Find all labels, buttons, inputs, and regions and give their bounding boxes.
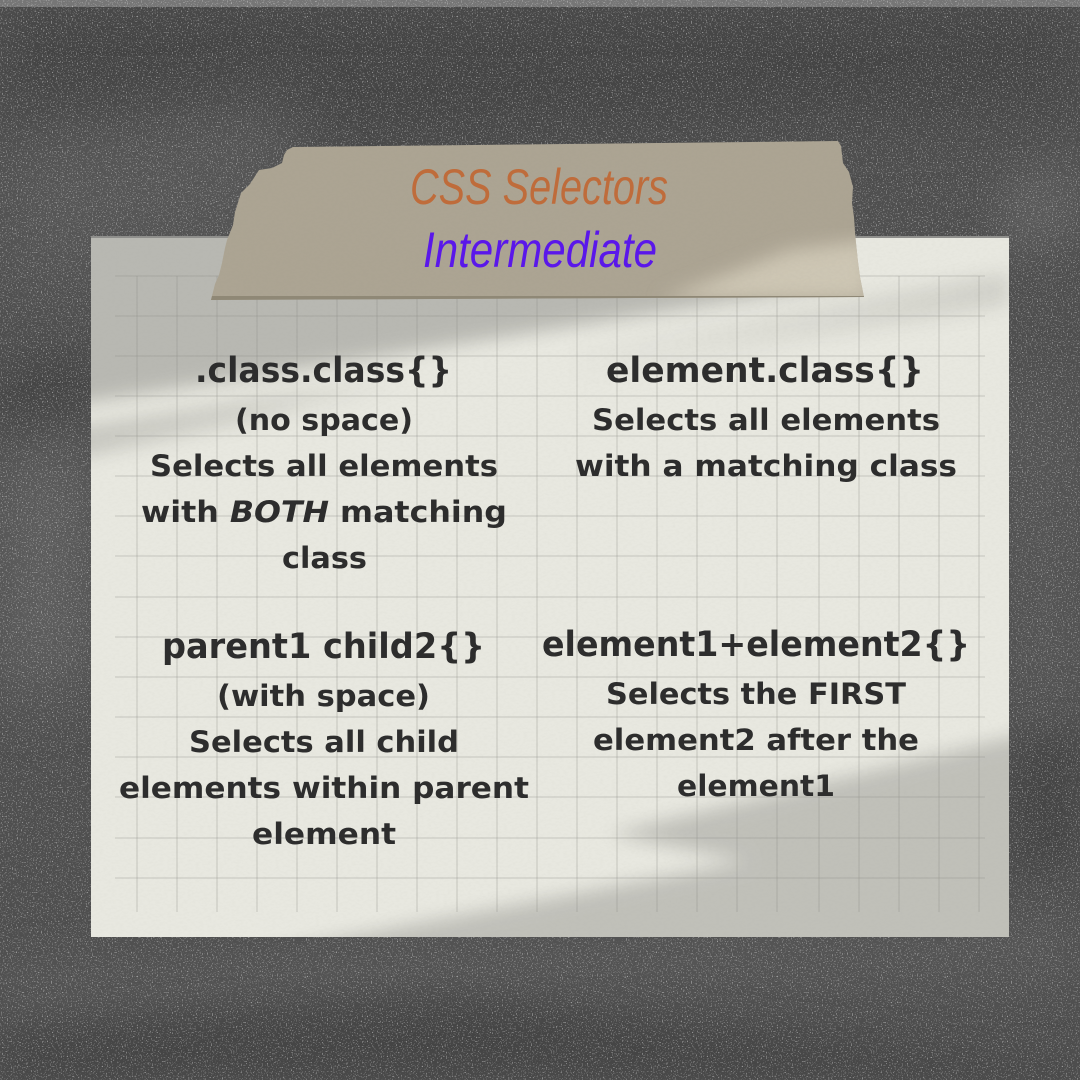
description: element.class: with a matching class	[575, 449, 957, 483]
description: element.class	[575, 403, 957, 483]
description: adjacent sibling: Selects the FIRST	[606, 677, 906, 711]
masking tape banner	[205, 140, 870, 305]
description: element.class: Selects all elements	[592, 403, 940, 437]
text block: .class.class	[141, 351, 507, 575]
description: adjacent sibling: element2 after the	[593, 723, 919, 757]
description: parent child: Selects all child	[189, 725, 459, 759]
description: class.class: (no space)	[235, 403, 413, 437]
description: class.class: Selects all elements	[150, 449, 498, 483]
description: parent child: (with space)	[217, 679, 430, 713]
text block: element.class	[575, 351, 957, 483]
heading: .class.class{}: .class.class{}	[195, 351, 452, 391]
description: adjacent sibling: element1	[677, 769, 835, 803]
grid lines	[115, 276, 985, 912]
title: CSS Selectors: CSS Selectors	[410, 159, 668, 215]
subtitle: Intermediate: Intermediate	[423, 222, 657, 278]
description: class.class: with BOTH matching	[141, 495, 507, 529]
description: parent child: element	[252, 817, 396, 851]
text block: element1+element2	[542, 625, 970, 803]
heading: element.class{}: element.class{}	[606, 351, 924, 391]
heading: element1+element2{}: element1+element2{}	[542, 625, 970, 665]
description: class.class: class	[282, 541, 367, 575]
heading: parent1 child2{}: parent1 child2{}	[162, 627, 485, 667]
description: parent child	[119, 679, 529, 851]
description: parent child: elements within parent	[119, 771, 529, 805]
description: class.class	[141, 403, 507, 575]
text block: parent1 child2	[119, 627, 529, 851]
description: adjacent sibling	[593, 677, 919, 803]
panel: grid paper sheet	[91, 236, 1009, 937]
